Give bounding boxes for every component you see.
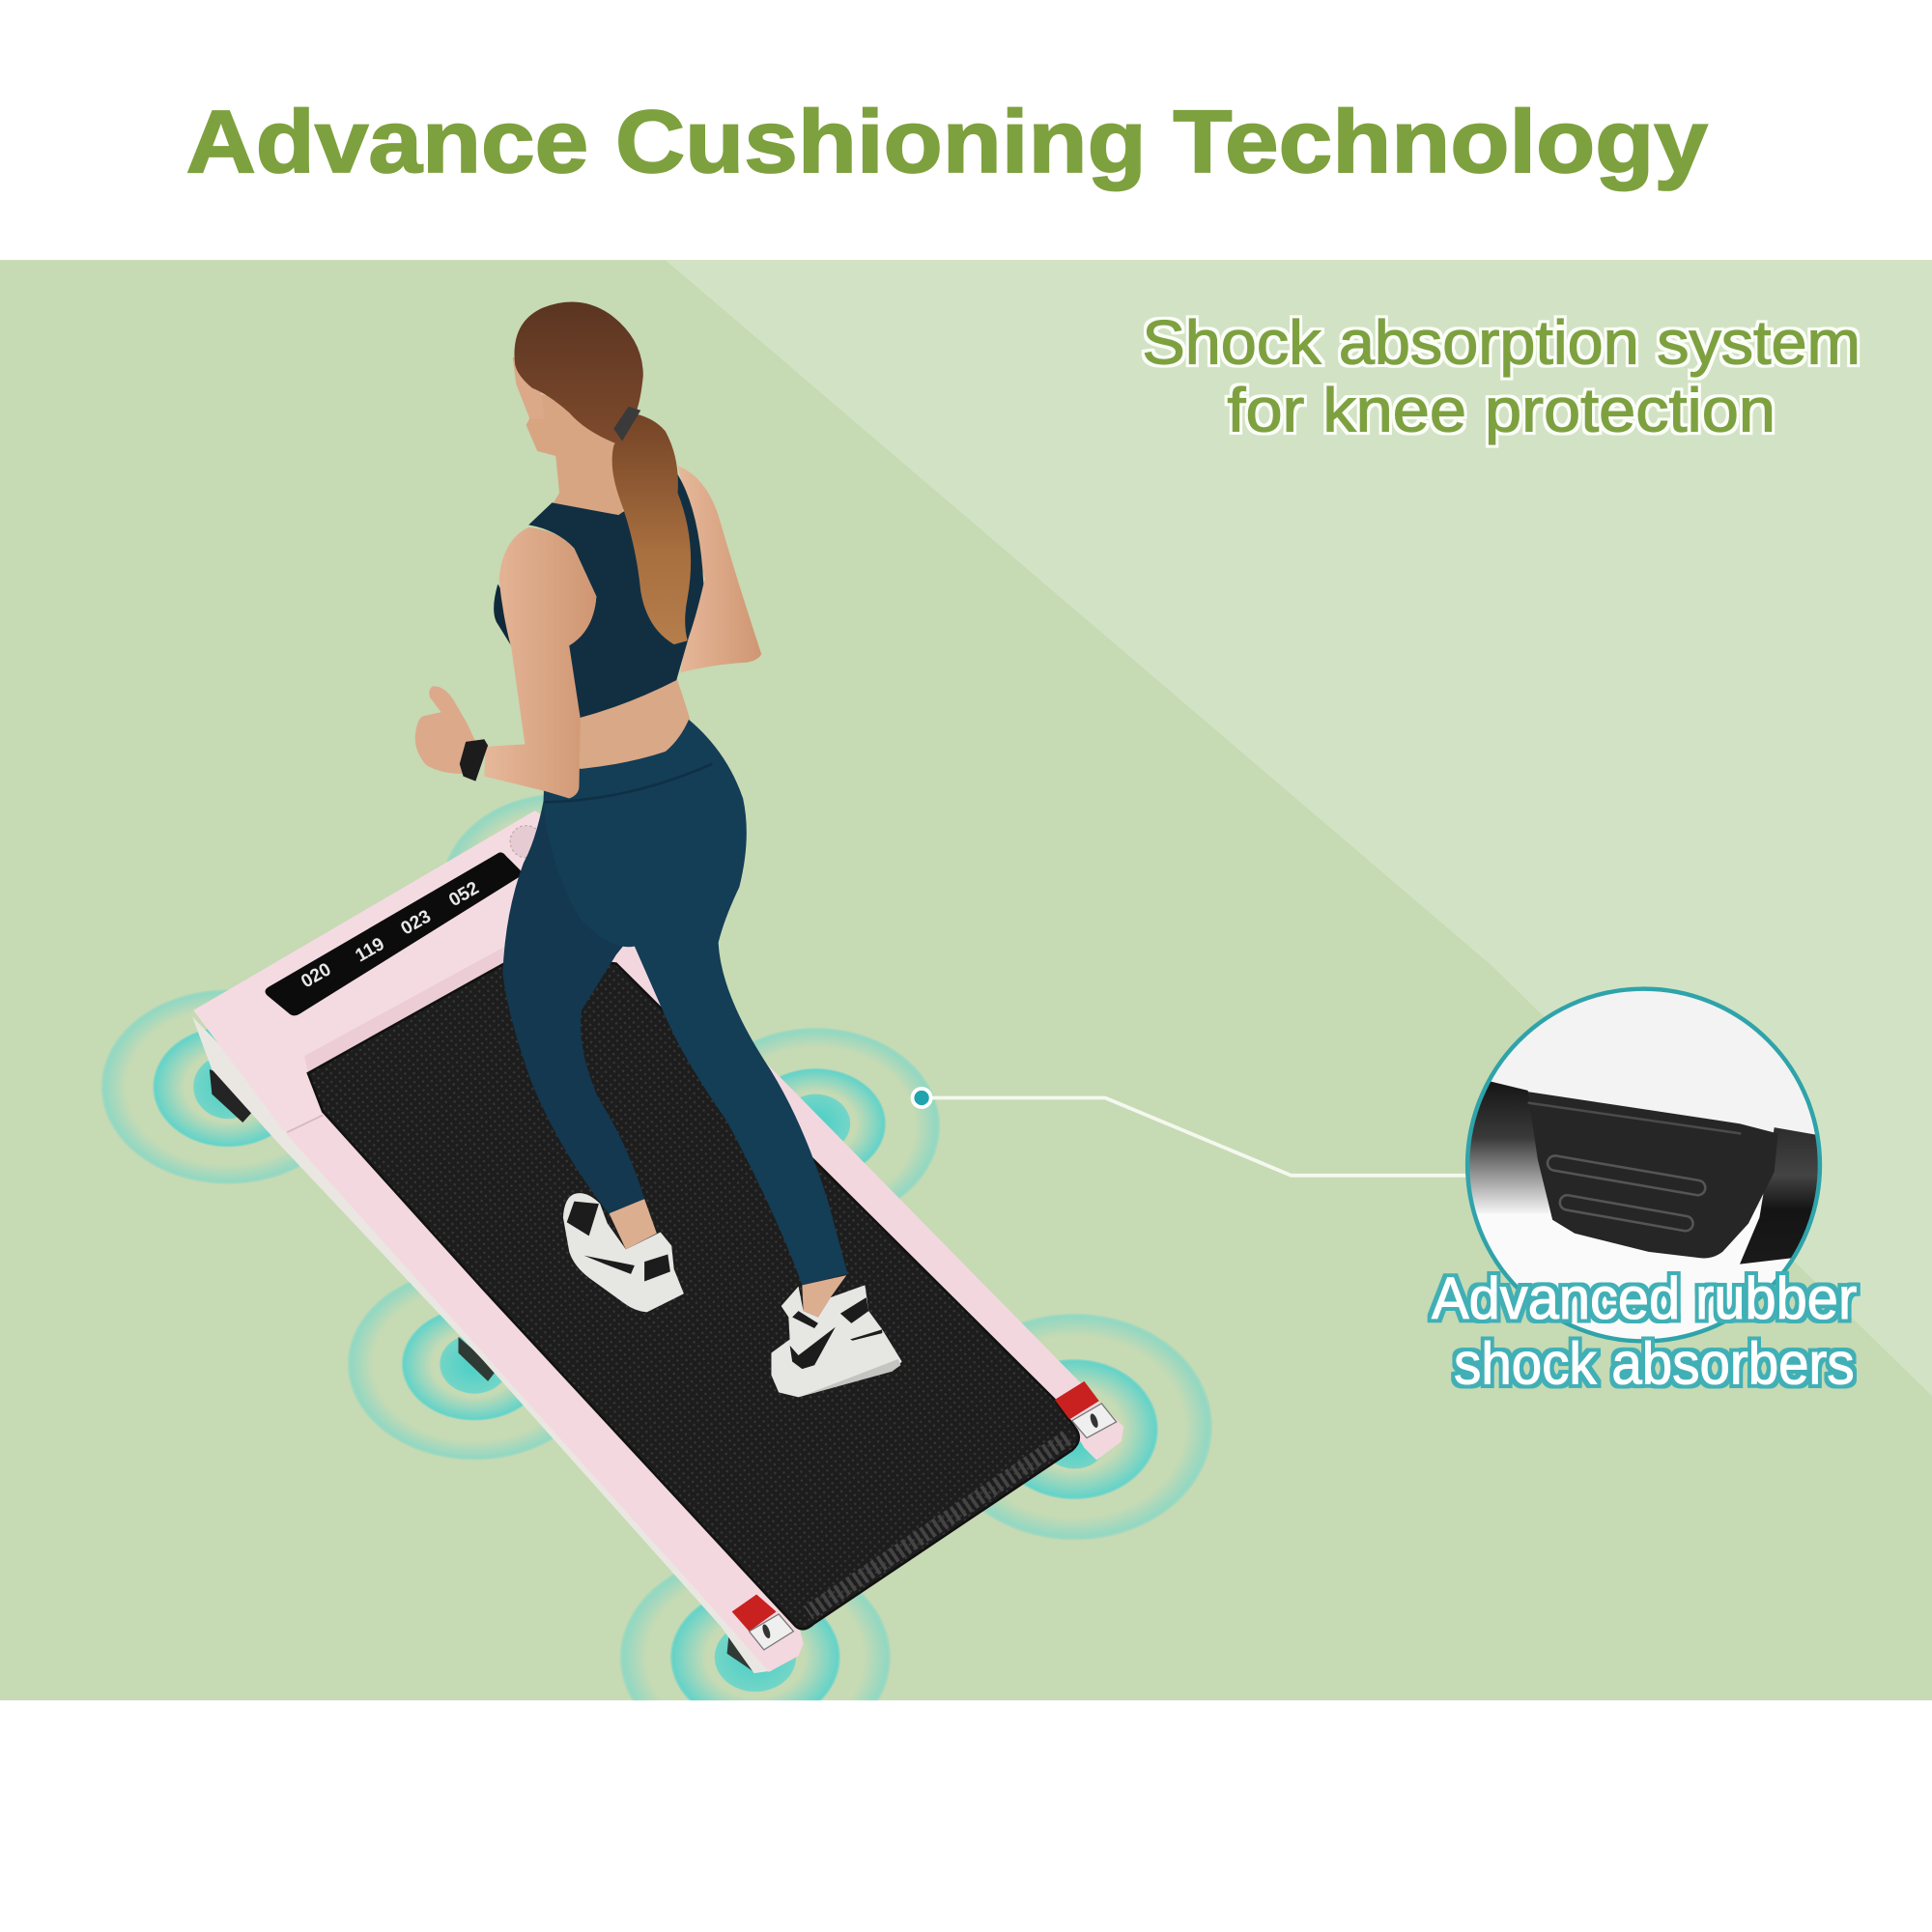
rear shoe: [563, 1193, 684, 1312]
neck: [526, 394, 631, 518]
display panel: 020: [298, 959, 334, 992]
display panel: 023: [398, 906, 435, 939]
bottom white area: [1466, 1208, 1824, 1355]
watch: [460, 739, 488, 781]
sports top left edge: [494, 584, 518, 648]
display panel: [266, 852, 522, 1015]
callout label: advanced rubber shock absorbers: [1432, 1265, 1857, 1396]
hand: [415, 686, 475, 774]
left arm: [484, 527, 596, 799]
rubber feet: [210, 1069, 766, 1672]
head hair: [514, 302, 643, 443]
waist skin: [577, 678, 690, 771]
right rail: [591, 929, 1123, 1460]
head console: [193, 810, 640, 1133]
left rail: [286, 1109, 804, 1672]
end cap stickers: right rail: [1055, 1381, 1117, 1438]
hair tie: [613, 407, 640, 441]
rubber foot: [1528, 1092, 1778, 1258]
right frame arm: [1740, 1127, 1824, 1264]
belt front roller: [809, 1438, 1067, 1613]
display panel: 119: [352, 934, 388, 967]
face sliver: [513, 357, 545, 419]
waistband shade: [543, 764, 712, 802]
front shoe: [771, 1285, 902, 1397]
end cap stickers: left rail: [732, 1595, 793, 1650]
silver frame side: [192, 1016, 771, 1673]
leggings: rear leg: [502, 788, 690, 1213]
ripple: left rear: [100, 989, 300, 1184]
callout label: advanced rubber shock absorbers: shock absorbers: [1454, 1330, 1855, 1396]
ripple: left middle: [348, 1282, 554, 1461]
right arm behind: [678, 466, 761, 672]
subtitle: shock absorption system: for knee protection: [1227, 375, 1776, 444]
speaker grille: [510, 826, 542, 858]
running belt: [308, 956, 1079, 1629]
callout lens: rubber shock absorber: [1466, 989, 1824, 1355]
ripple: right bottom: [983, 1314, 1212, 1540]
title: Advance Cushioning Technology: [186, 93, 1708, 191]
connector dot: [913, 1089, 931, 1107]
display panel: 052: [445, 878, 483, 911]
runner: [415, 302, 902, 1397]
foot groove lower: [1567, 1203, 1686, 1224]
ankles: [609, 1199, 846, 1318]
subtitle: shock absorption system: [1142, 307, 1861, 444]
treadmill: [192, 810, 1123, 1673]
ponytail: [612, 412, 691, 644]
ripple: top: [446, 794, 544, 863]
ripple: bottom left: [620, 1574, 891, 1700]
foot ledge: [1528, 1103, 1741, 1133]
connector line: [922, 1097, 1468, 1176]
vibration ripples under treadmill feet: [101, 793, 1212, 1762]
green background panel: [0, 260, 1932, 1700]
leggings: hips and front leg: [543, 720, 848, 1285]
console inner bevel: [304, 947, 518, 1073]
seam: [287, 1115, 323, 1132]
left frame arm: [1466, 1076, 1550, 1213]
sports top: [528, 474, 703, 719]
subtitle: shock absorption system: Shock absorption system: [1142, 307, 1861, 377]
foot groove upper: [1555, 1163, 1698, 1188]
ripple: right upper: [753, 1028, 941, 1199]
callout label: advanced rubber shock absorbers: Advanced rubber: [1432, 1265, 1857, 1331]
